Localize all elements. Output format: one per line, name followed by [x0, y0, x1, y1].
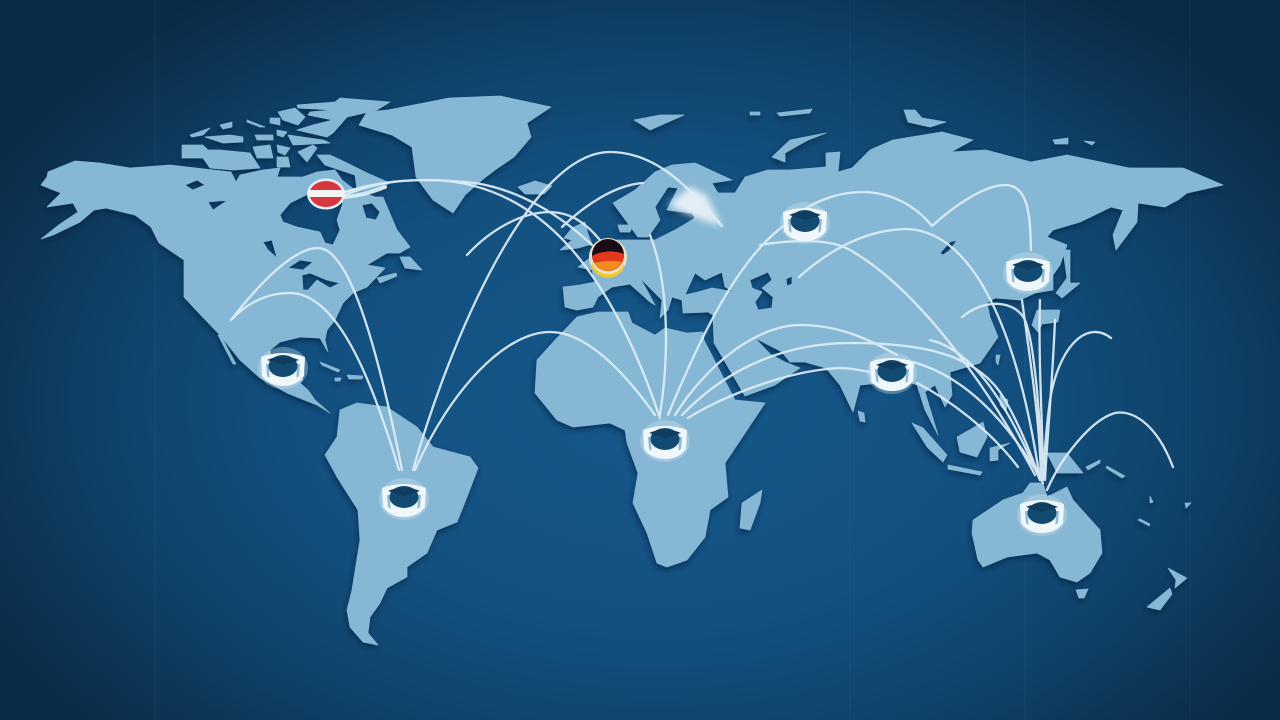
- arc: Germany to Scandinavia: [562, 183, 643, 227]
- landmass: Africa: [535, 312, 765, 567]
- world map landmasses: [41, 96, 1223, 645]
- arc: Mexico to South America upper: [231, 248, 402, 470]
- arc: far Pacific to Australia: [1047, 413, 1173, 490]
- landmass: Tasmania: [1076, 589, 1088, 598]
- icon: German flag marker: [589, 238, 627, 278]
- icon: graduation cap Mexico: [258, 347, 308, 389]
- arcs: China to Australia: [1022, 300, 1041, 480]
- landmass: Greenland: [359, 96, 551, 213]
- icon: graduation cap South America: [379, 478, 429, 520]
- arc: Africa to Russia: [668, 225, 785, 415]
- icon: red and white flag marker: [307, 178, 345, 210]
- landmass: North America: [41, 161, 410, 413]
- arc: Russia to Siberia: [785, 192, 932, 226]
- landmass: Eurasia: [563, 132, 1223, 435]
- landmass: Australia: [972, 483, 1102, 582]
- landmass: Iceland: [518, 181, 552, 194]
- arc: India to Indonesia: [917, 383, 1018, 467]
- arc: Canada to Africa: [345, 180, 660, 418]
- icon: graduation cap China: [1003, 252, 1053, 294]
- arc: Central Asia to Australia: [760, 241, 1035, 475]
- arc: Atlantic to Germany: [467, 212, 600, 255]
- arc: Mexico to South America lower: [231, 293, 399, 470]
- arc: Africa to India lower: [688, 368, 870, 418]
- icon: graduation cap India: [867, 352, 917, 394]
- landmass: Caribbean islands: [320, 362, 363, 381]
- landmass: Madagascar: [740, 490, 762, 530]
- landmass: New Zealand: [1147, 568, 1187, 610]
- arc: South America to Russia: [413, 152, 722, 470]
- arc: Siberia to China: [932, 185, 1031, 250]
- arc: Africa to Europe: [650, 235, 666, 415]
- landmass: Denmark: [618, 225, 633, 232]
- landmass: Great Britain and Ireland: [560, 222, 592, 250]
- landmass: Arctic Russian islands: [634, 109, 1095, 162]
- icon: graduation cap Africa: [640, 420, 690, 462]
- arc: South China to Australia: [962, 304, 1042, 470]
- arc: Africa to Australia: [682, 343, 1040, 480]
- arc: Africa to India: [675, 325, 897, 415]
- glow: white smear over Scandinavia: [668, 187, 722, 226]
- landmass: Canadian arctic islands: [182, 98, 422, 283]
- arc: Canada to Germany: [345, 180, 592, 245]
- arc: South America to Africa: [415, 332, 655, 470]
- arc: thick start near Canada: [344, 187, 385, 197]
- icon: graduation cap Russia: [780, 202, 830, 244]
- arc: Southeast Asia to Australia: [930, 340, 1040, 480]
- arc: India to Australia: [913, 362, 1043, 483]
- icon: graduation cap Australia: [1017, 494, 1067, 536]
- arc: Caspian to Australia: [799, 229, 1040, 480]
- connection arcs: [231, 152, 1173, 490]
- landmass: Indonesia and Pacific islands: [858, 355, 1191, 526]
- arc: Pacific to Australia: [1043, 332, 1111, 480]
- landmass: Japan and Korea: [1032, 250, 1080, 332]
- landmass: South America: [325, 403, 478, 645]
